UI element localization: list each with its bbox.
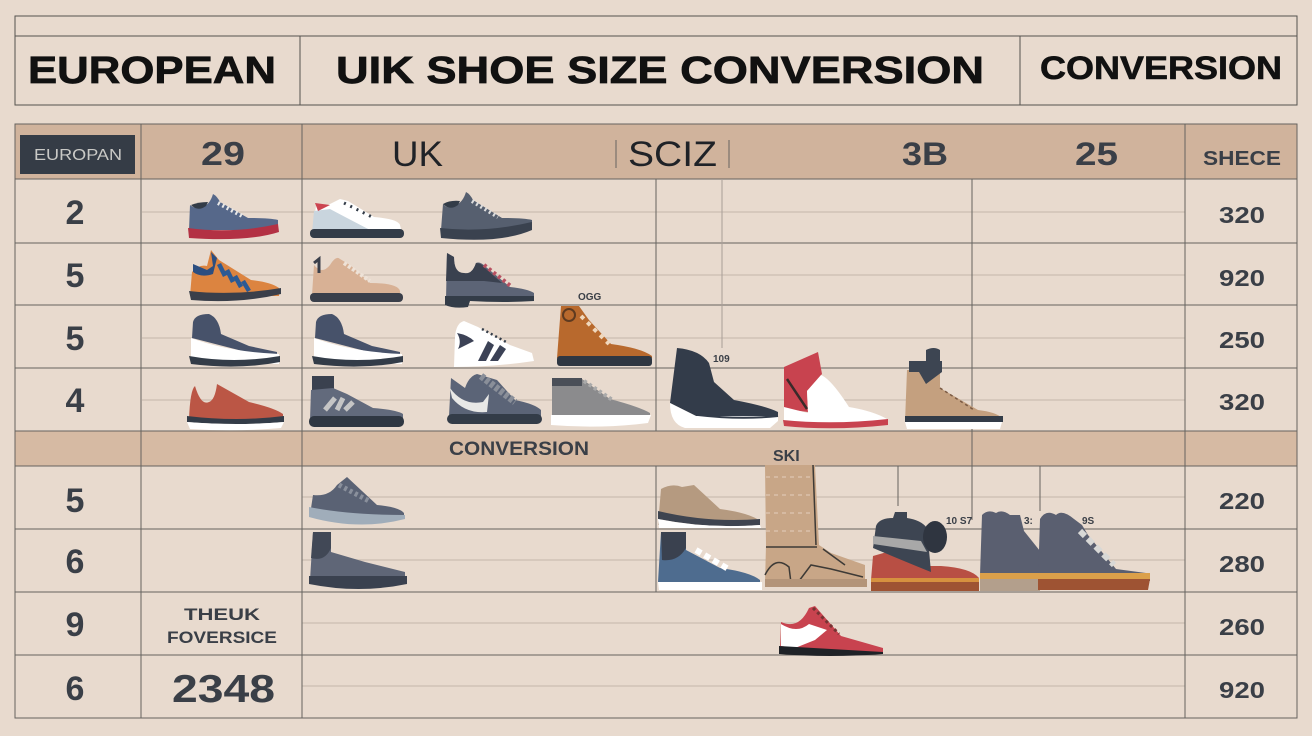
shoe: terracotta bbox=[187, 384, 284, 430]
small shoe labels: 10 S7 bbox=[946, 516, 973, 527]
label: europan badge: EUROPAN bbox=[34, 147, 122, 164]
shoe: navy white 1 bbox=[189, 314, 280, 367]
shoe: slate half bbox=[980, 511, 1040, 591]
left column sizes: 2 bbox=[66, 194, 84, 232]
heading: conversion: CONVERSION bbox=[1040, 50, 1282, 86]
shoe: blue bbox=[658, 532, 762, 590]
small shoe labels bbox=[578, 292, 1095, 527]
shoe: red white low bbox=[779, 606, 883, 656]
shoe: tan tall boot bbox=[765, 465, 867, 587]
shoe: tan low bbox=[310, 258, 403, 302]
shoe: slate high top bbox=[1038, 513, 1150, 590]
shoe: slate low bbox=[309, 477, 405, 525]
shoe: red white high top bbox=[783, 352, 888, 428]
shoe: white pale bbox=[310, 199, 404, 238]
left column sizes: 5 bbox=[66, 320, 84, 358]
left column sizes: 9 bbox=[66, 606, 84, 644]
right column values: 920 bbox=[1219, 677, 1265, 703]
small shoe labels: 3: bbox=[1024, 516, 1033, 527]
shoe: grey dark collar bbox=[445, 253, 534, 308]
title bar bbox=[15, 16, 1297, 105]
header: UK: UK bbox=[392, 135, 443, 174]
conversion band bbox=[15, 431, 1297, 466]
shoe: light grey bbox=[551, 378, 651, 427]
shoe: white stripes bbox=[454, 321, 534, 367]
shoe: taupe bbox=[658, 485, 761, 528]
right column values: 220 bbox=[1219, 488, 1265, 514]
conversion band: CONVERSION bbox=[449, 439, 589, 460]
shoe: grey bbox=[440, 192, 532, 240]
shoe: orange bbox=[189, 250, 281, 301]
right column values bbox=[1219, 202, 1265, 703]
right column values: 920 bbox=[1219, 265, 1265, 291]
right column values: 250 bbox=[1219, 327, 1265, 353]
shoe: navy white 2 bbox=[312, 314, 403, 367]
heading: main title: UIK SHOE SIZE CONVERSION bbox=[336, 50, 984, 92]
right column values: 320 bbox=[1219, 389, 1265, 415]
right column values: 260 bbox=[1219, 614, 1265, 640]
shoe: tan boot navy collar bbox=[905, 348, 1003, 429]
shoe: black high top bbox=[670, 348, 778, 428]
table grid bbox=[15, 124, 1297, 718]
header: 29: 29 bbox=[201, 135, 245, 172]
left column sizes: 6 bbox=[66, 543, 84, 581]
conversion note: FOVERSICE bbox=[167, 628, 277, 647]
small shoe labels: SKI bbox=[773, 448, 800, 465]
shoe: grey swoosh bbox=[447, 374, 542, 424]
shoe: grey pattern bbox=[309, 376, 404, 427]
left column sizes: 5 bbox=[66, 482, 84, 520]
header: 3B: 3B bbox=[902, 136, 948, 172]
left column sizes: 6 bbox=[66, 670, 84, 708]
small shoe labels: 109 bbox=[713, 354, 730, 365]
conversion note bbox=[167, 605, 277, 711]
small shoe labels: OGG bbox=[578, 292, 602, 303]
table header band bbox=[15, 124, 1297, 179]
header: SCIZ: SCIZ bbox=[628, 135, 717, 174]
header: 25: 25 bbox=[1075, 136, 1118, 172]
shoe: red navy ski boot bbox=[871, 512, 979, 591]
header: SHECE: SHECE bbox=[1203, 148, 1281, 170]
right column values: 320 bbox=[1219, 202, 1265, 228]
heading: european: EUROPEAN bbox=[28, 50, 276, 92]
left column sizes: 4 bbox=[66, 382, 85, 420]
left column sizes bbox=[66, 194, 85, 708]
shoe: blue red sole bbox=[188, 194, 279, 239]
conversion note: THEUK bbox=[184, 605, 261, 624]
conversion note: 2348 bbox=[172, 668, 275, 711]
shoe: grey bbox=[309, 532, 407, 589]
left column sizes: 5 bbox=[66, 257, 84, 295]
right column values: 280 bbox=[1219, 551, 1265, 577]
shoe: brown boot bbox=[557, 306, 652, 366]
label: europan badge bbox=[20, 135, 135, 174]
small shoe labels: 9S bbox=[1082, 516, 1095, 527]
